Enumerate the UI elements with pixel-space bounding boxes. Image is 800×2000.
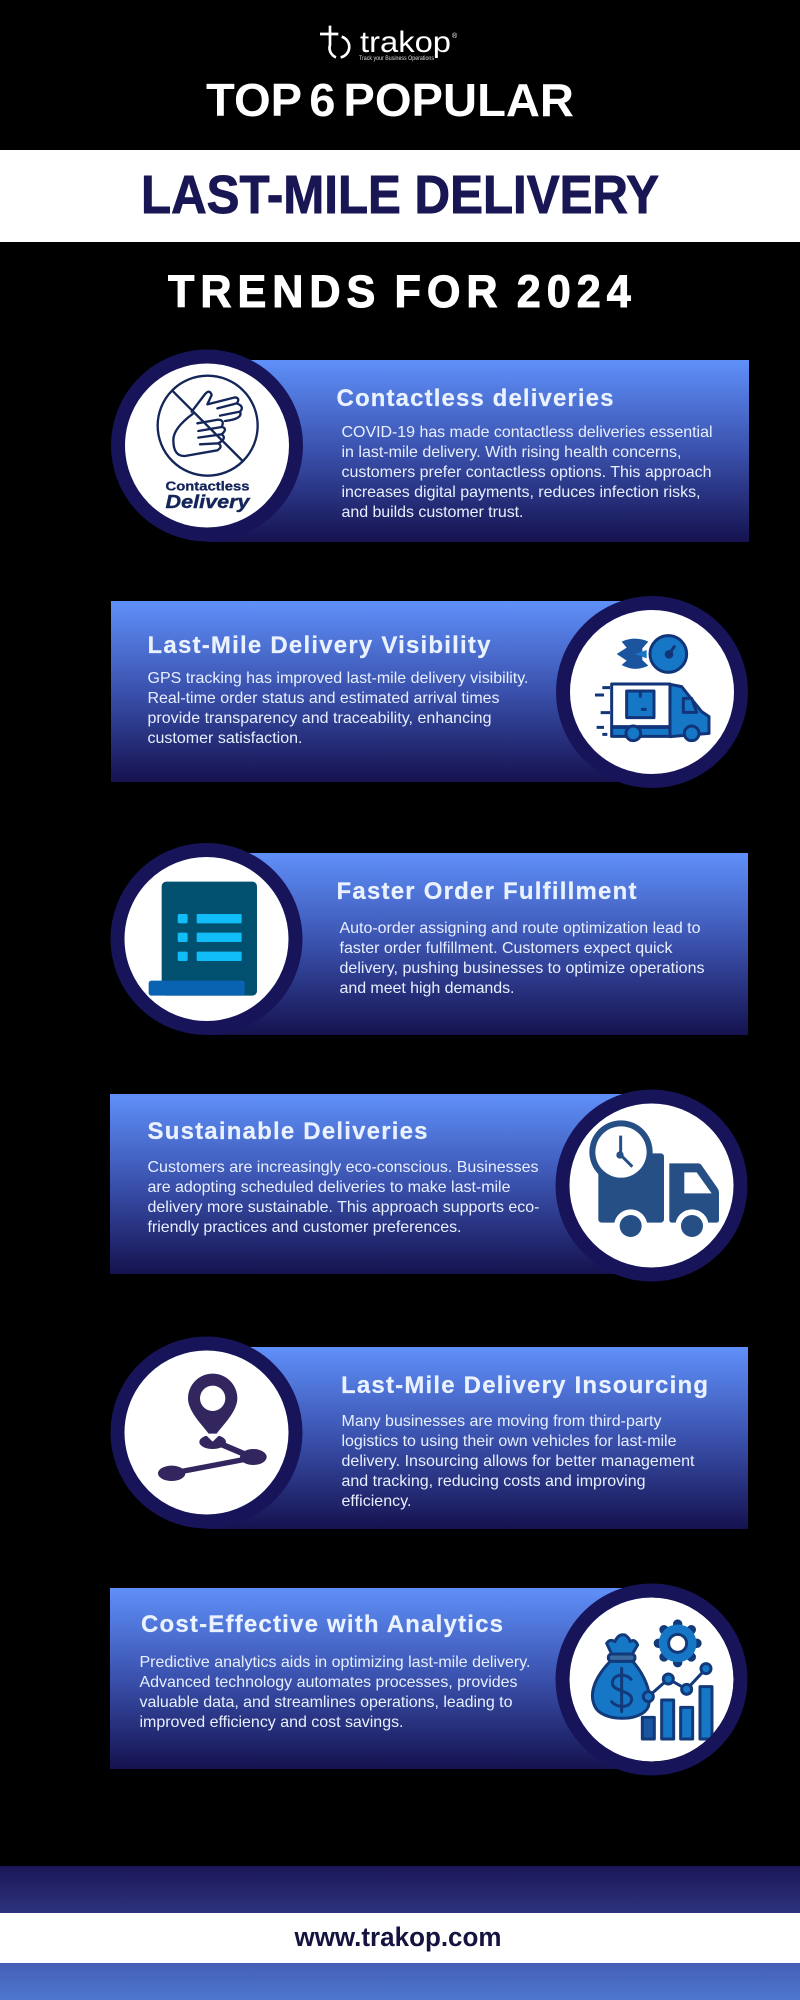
footer white strip — [0, 1913, 800, 1963]
body text: and tracking, reducing costs and improving — [342, 1473, 646, 1490]
body text — [148, 670, 528, 747]
card background — [110, 1588, 651, 1769]
package — [627, 691, 654, 718]
body text: Advanced technology automates processes, provides — [140, 1674, 518, 1691]
body text — [342, 1413, 695, 1510]
body text — [148, 1159, 540, 1236]
title: top 6 popular: TOP 6 POPULAR — [206, 74, 574, 126]
title band — [0, 150, 800, 242]
card background — [207, 1347, 748, 1529]
body text: delivery more sustainable. This approach supports eco- — [148, 1199, 540, 1216]
gear — [658, 1624, 697, 1663]
body text: Customers are increasingly eco-conscious. Businesses — [148, 1159, 538, 1176]
wheels — [626, 726, 641, 741]
body text: and meet high demands. — [340, 980, 514, 997]
panel: sustainable deliveries — [110, 1094, 740, 1274]
icon: contactless delivery badge — [118, 356, 296, 534]
panel: faster order fulfillment — [118, 850, 748, 1035]
badge text: delivery: Delivery — [166, 491, 251, 512]
currency mark — [617, 639, 648, 669]
icon: location pin with route — [118, 1344, 296, 1522]
body text: efficiency. — [342, 1493, 412, 1510]
website url: www.trakop.com — [294, 1922, 502, 1952]
icon: trakop mark — [320, 26, 349, 57]
panel: last-mile delivery visibility — [111, 601, 741, 782]
footer gradient — [0, 1866, 800, 2000]
icon ring — [562, 1590, 740, 1768]
money bag — [592, 1660, 649, 1718]
icon: order document list — [118, 850, 296, 1028]
body text — [340, 920, 704, 997]
body text: Real-time order status and estimated arrival times — [148, 690, 500, 707]
body text: and builds customer trust. — [342, 504, 524, 521]
logo: trakop — [320, 26, 458, 62]
heading: Cost-Effective with Analytics — [141, 1611, 503, 1638]
body text: valuable data, and streamlines operations, leading to — [140, 1694, 513, 1711]
truck cargo box — [612, 684, 670, 727]
card background — [110, 1094, 651, 1274]
card background — [207, 853, 748, 1035]
title: last-mile delivery: LAST-MILE DELIVERY — [141, 165, 659, 225]
body text: faster order fulfillment. Customers expect quick — [340, 940, 674, 957]
no-contact hands symbol — [158, 376, 258, 476]
body text: Many businesses are moving from third-party — [342, 1413, 662, 1430]
heading: Contactless deliveries — [336, 385, 614, 412]
body text: are adopting scheduled deliveries to make last-mile — [148, 1179, 511, 1196]
badge text: contactless: Contactless — [166, 480, 250, 494]
card background — [207, 360, 749, 542]
body text — [342, 424, 712, 521]
cab — [670, 684, 709, 737]
speed lines — [595, 688, 610, 734]
body text: delivery. Insourcing allows for better management — [342, 1453, 695, 1470]
panel: cost-effective with analytics — [110, 1588, 740, 1769]
panel: contactless deliveries — [118, 356, 749, 542]
logo tagline: Track your Business Operations — [359, 55, 435, 62]
footer band — [0, 1866, 800, 2000]
body text: increases digital payments, reduces infection risks, — [342, 484, 700, 501]
body text: customers prefer contactless options. This approach — [342, 464, 712, 481]
logo wordmark: trakop — [360, 26, 451, 59]
card background — [111, 601, 652, 782]
body text: COVID-19 has made contactless deliveries essential — [342, 424, 712, 441]
body text: friendly practices and customer preferences. — [148, 1219, 462, 1236]
title: trends for 2024: TRENDS FOR 2024 — [168, 267, 631, 317]
body text: delivery, pushing businesses to optimize operations — [340, 960, 704, 977]
heading: Sustainable Deliveries — [148, 1118, 428, 1145]
heading: Faster Order Fulfillment — [336, 878, 636, 905]
icon: delivery truck with gauge — [563, 603, 741, 781]
body text: logistics to using their own vehicles for last-mile — [342, 1433, 677, 1450]
gauge — [650, 636, 687, 672]
body text: provide transparency and traceability, enhancing — [148, 710, 492, 727]
body text — [140, 1654, 530, 1731]
icon: money bag, gear and chart — [562, 1590, 740, 1768]
body text: improved efficiency and cost savings. — [140, 1714, 404, 1731]
heading: Last-Mile Delivery Insourcing — [341, 1372, 708, 1399]
bars — [642, 1717, 654, 1739]
panel: last-mile delivery insourcing — [118, 1344, 748, 1529]
body text: customer satisfaction. — [148, 730, 302, 747]
body text: Auto-order assigning and route optimization lead to — [340, 920, 701, 937]
body text: in last-mile delivery. With rising health concerns, — [342, 444, 682, 461]
registered mark: ® — [452, 32, 458, 40]
line chart — [648, 1669, 706, 1697]
icon: truck with clock — [562, 1096, 740, 1274]
heading: Last-Mile Delivery Visibility — [148, 632, 491, 659]
body text: Predictive analytics aids in optimizing last-mile delivery. — [140, 1654, 530, 1671]
body text: GPS tracking has improved last-mile delivery visibility. — [148, 670, 528, 687]
band background — [0, 150, 800, 242]
